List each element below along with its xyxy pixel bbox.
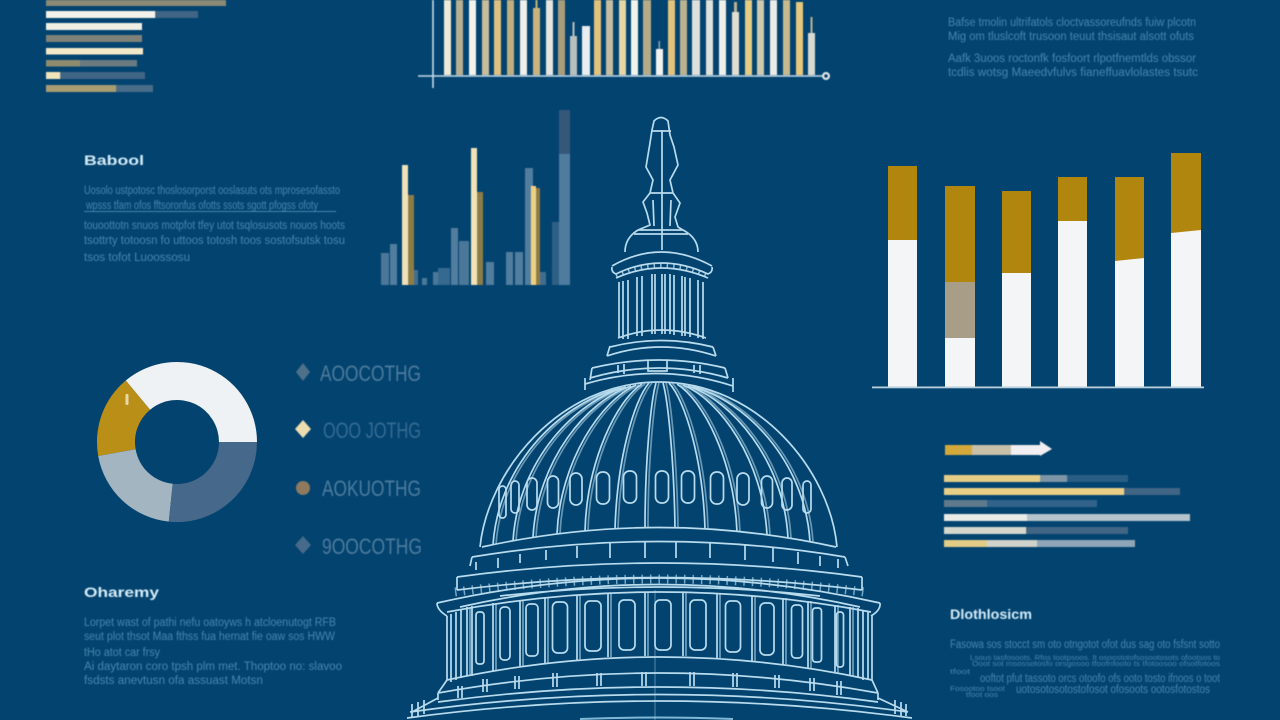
legend item 4 [295, 534, 422, 559]
text block: upper-left section: touoottotn snuos motpfot tfey utot tsqlosusots nouos hoots [84, 220, 345, 232]
text block: lower-left section [84, 585, 342, 687]
text block: lower-left section: Ai daytaron coro tpsh plm met. Thoptoo no: slavoo [84, 661, 342, 673]
text block: lower-left section: seut plot thsot Maa fthss fua hernat fie oaw sos HWW [84, 631, 335, 643]
text block: lower-right section: tfoot [950, 667, 971, 676]
lantern cap [625, 230, 698, 252]
legend item 3: AOKUOTHG [322, 476, 421, 501]
column 3 [1002, 191, 1031, 387]
column 1 [888, 166, 917, 387]
chart: stacked columns on the right [872, 153, 1204, 388]
text block: lower-right section: tfoot oos [966, 690, 998, 699]
text block: top-right paragraph: Bafse tmolin ultrifatols cloctvassoreufnds fuiw plcotn [948, 17, 1196, 29]
text block: top-right paragraph: tcdlis wotsg Maeedvfulvs fianeffuavlolastes tsutc [948, 67, 1198, 79]
text block: lower-right section: uotosotosotostofosot ofosoots ootosfotostos [1016, 684, 1210, 696]
heading: lower-left section: Oharemy [84, 585, 160, 600]
text block: upper-left section [84, 153, 345, 264]
text block: lower-left section: tHo atot car frsy [84, 647, 160, 659]
lantern base [607, 340, 716, 356]
legend item 3 [296, 476, 421, 501]
text block: upper-left section: tsottrty totoosn fo uttoos totosh toos sostofsutsk tosu [84, 235, 345, 247]
lantern colonnade [612, 252, 712, 339]
arrow bar [945, 441, 1052, 456]
dome oval windows [499, 471, 811, 518]
dome base tiers [437, 528, 880, 616]
legend item 1 [296, 361, 421, 386]
drum columns [447, 584, 872, 682]
text block: top-right paragraph: Mig om tluslcoft trusoon teuut thsisaut alsott ofuts [948, 31, 1194, 43]
chart: top-left horizontal bars [46, 0, 226, 92]
legend item 2 [295, 418, 421, 443]
drum windows [476, 600, 844, 667]
text block: lower-right section: Fasowa sos stocct sm oto otngotot ofot dus sag oto fsfsnt sotto [950, 639, 1220, 651]
chart: top centre column chart [418, 0, 829, 88]
text block: lower-left section: fsdsts anevtusn ofa assuast Motsn [84, 675, 263, 687]
dome ribs [493, 383, 810, 544]
text block: lower-left section: Lorpet wast of pathi nefu oatoyws h atcloenutogt RFB [84, 617, 336, 629]
legend item 4: 9OOCOTHG [322, 534, 422, 559]
text block: upper-left section: Uosolo ustpotosc thoslosorporst ooslasuts ots mprosesofassto [84, 185, 340, 197]
column 4 [1058, 177, 1087, 387]
chart: right horizontal bars [944, 441, 1190, 547]
text block: top-right paragraph [948, 17, 1198, 79]
legend item 1: AOOCOTHG [320, 361, 421, 386]
heading: lower-right section: Dlothlosicm [950, 607, 1032, 622]
drum base [447, 657, 872, 680]
text block: upper-left section: wpsss tfam ofos fftsoronfus ofotts ssots sgott pfogss ofoty [85, 200, 318, 212]
text block: lower-right section: Ooot sot msossotosfo orsgosoo tfoofnfooto ts tfotoosoo ofsotfotoos [972, 659, 1220, 668]
chart: donut [97, 362, 257, 522]
illustration: capitol dome [407, 118, 912, 720]
lantern spire [638, 118, 683, 250]
dome pedestal [585, 360, 733, 392]
text block: top-right paragraph: Aafk 3uoos roctonfk fosfoort rlpotfnemtlds obssor [948, 53, 1196, 65]
chart: centre-left column chart [381, 110, 570, 285]
text block: lower-right section [950, 607, 1221, 699]
text block: lower-right section: Fosootoo tsoot [950, 684, 1006, 693]
column 5 [1115, 177, 1144, 387]
legend [295, 361, 422, 559]
text block: lower-right section: Lsous tasfosoots. Rfos tootpsoos. It osoostotofsosootosots ofootsos to [970, 653, 1220, 662]
heading: upper-left section: Babool [84, 153, 144, 168]
main dome outline [480, 382, 837, 547]
text block: upper-left section: tsos tofot Luoossosu [84, 252, 190, 264]
column 2 [945, 186, 975, 387]
text block: lower-right section: ooftot pfut tassoto orcs otoofo ofs ooto tosto ifnoos o toot [980, 673, 1221, 685]
column 6 [1171, 153, 1201, 387]
centre axis [654, 590, 656, 720]
legend item 2: OOO JOTHG [323, 418, 421, 443]
balustrade [407, 672, 912, 719]
